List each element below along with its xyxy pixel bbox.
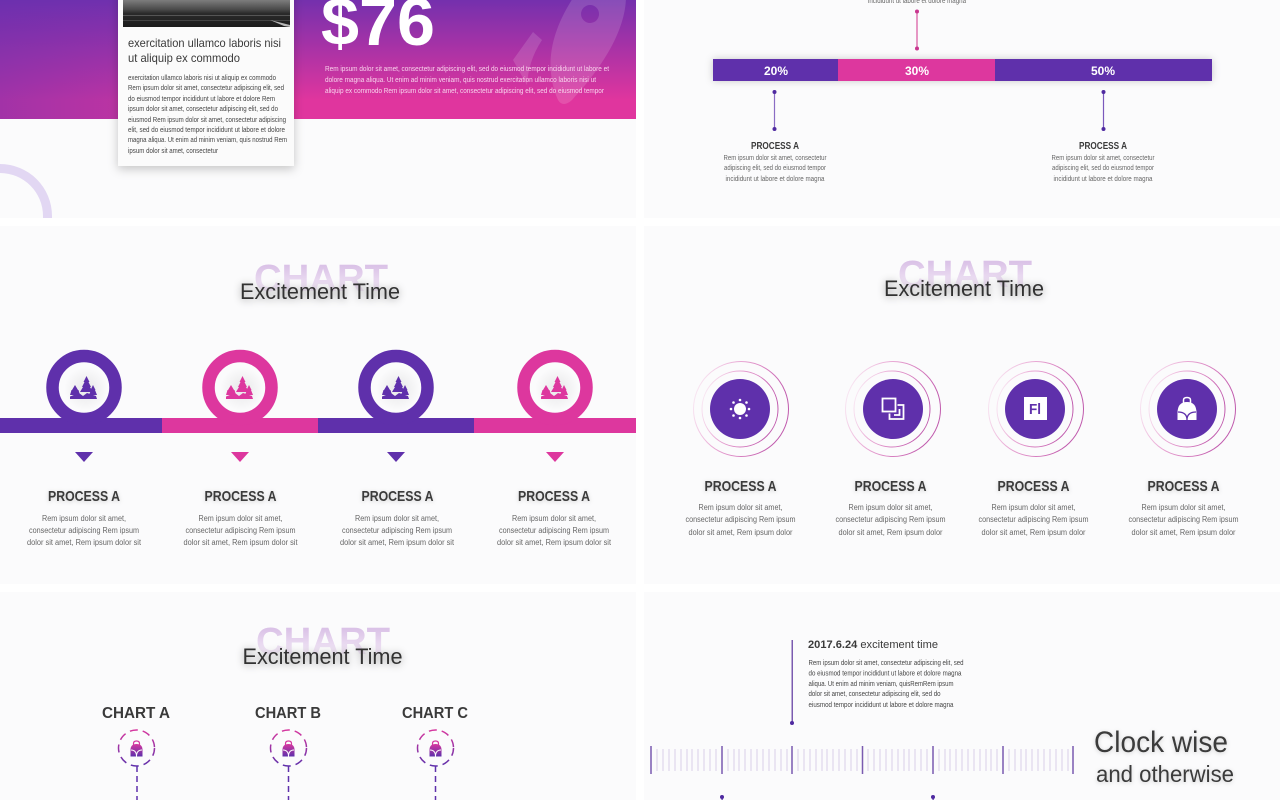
text: 50% process: Rem ipsum dolor sit amet, consectetur [1052,155,1155,162]
item 1: sun icon: PROCESS A [704,478,777,495]
text: 50% process: PROCESS A [1079,140,1127,152]
heading: Excitement Time [242,644,402,669]
card body: do eiusmod tempor incididunt ut labore et dolore Rem [128,96,275,103]
step 3: dolor sit amet, Rem ipsum dolor sit [340,538,455,547]
card body: ipsum dolor sit amet, consectetur [128,148,219,155]
step 3: consectetur adipiscing Rem ipsum [342,526,452,535]
text: 20% process: PROCESS A [751,140,799,152]
item 2: layers icon [836,362,946,537]
item 3: Fl file icon: dolor sit amet, Rem ipsum dolor [982,528,1086,537]
step 3: Rem ipsum dolor sit amet, [355,514,439,523]
item 2: layers icon: dolor sit amet, Rem ipsum dolor [838,528,943,537]
heading: Excitement Time [884,276,1044,301]
card body: elit, sed do eiusmod tempor incididunt ut labore et dolore [128,127,285,134]
tick ruler [651,746,1073,774]
photo [123,0,290,27]
connector: 20% [772,90,776,131]
caption [1094,726,1234,787]
card heading: exercitation ullamco laboris nisi [128,36,281,50]
stacked bar: 50% [1091,64,1115,78]
ribbon bar [0,418,636,433]
chart A: CHART A [102,705,170,722]
heading: Excitement Time [240,279,400,304]
card body: eiusmod Rem ipsum dolor sit amet, consectetur adipiscing [128,117,286,124]
card body: magna aliqua. Ut enim ad minim veniam, quis nostrud Rem [128,137,287,144]
step 2: Rem ipsum dolor sit amet, [198,514,282,523]
card heading [128,36,281,65]
step 1: dolor sit amet, Rem ipsum dolor sit [27,538,142,547]
step 4 [497,356,612,547]
event text: do eiusmod tempor incididunt ut labore et dolore magna [808,670,962,678]
banner text: aliquip ex commodo Rem ipsum dolor sit amet, consectetur adipiscing elit, sed do eiusmod tempor [325,88,605,95]
step 2: PROCESS A [204,488,277,505]
card body: exercitation ullamco laboris nisi ut aliquip ex commodo [128,75,276,82]
chart A [102,705,170,800]
step 2: dolor sit amet, Rem ipsum dolor sit [184,538,298,547]
step 1 [27,356,142,547]
heading: CHART [898,254,1032,296]
item 4: backpack icon: Rem ipsum dolor sit amet, [1142,503,1226,512]
event text: dolor sit amet, consectetur adipiscing elit, sed do [808,691,941,698]
item 3: Fl file icon: Rem ipsum dolor sit amet, [992,503,1076,512]
text: 20% process: Rem ipsum dolor sit amet, consectetur [724,155,827,162]
banner text [325,66,609,95]
item 1: sun icon: Rem ipsum dolor sit amet, [698,503,782,512]
bottom markers [720,795,935,800]
gradient banner [0,0,636,119]
card body [128,75,287,155]
text: 20% process [724,140,827,183]
item 2: layers icon: PROCESS A [854,478,927,495]
item 3: Fl file icon [978,362,1089,537]
text: 20% process: adipiscing elit, sed do eiusmod tempor [724,165,827,172]
step 4: Rem ipsum dolor sit amet, [512,514,596,523]
card body: ipsum dolor sit amet, consectetur adipiscing elit, sed do [128,106,278,113]
event text: Rem ipsum dolor sit amet, consectetur adipiscing elit, sed [808,660,964,667]
panel: chart columns slide [0,592,636,800]
item 3: Fl file icon: Fl [1029,401,1041,418]
item 1: sun icon [686,362,796,537]
connector: 30% [915,10,919,50]
heading: CHART [256,621,390,663]
step 2 [184,356,298,547]
stacked bar: 20% [764,64,788,78]
panel: ringed icons slide [644,226,1280,584]
step 3 [340,356,455,547]
card body: Rem ipsum dolor sit amet, consectetur adipiscing elit, sed [128,85,284,92]
icon: rocket watermark [513,0,626,104]
item 1: sun icon: consectetur adipiscing Rem ipsum [686,515,796,524]
step 1: PROCESS A [48,488,120,505]
chart B [255,705,321,800]
decorative ring [0,164,52,218]
item 3: Fl file icon: consectetur adipiscing Rem ipsum [978,515,1089,524]
panel: percentage bar slide [644,0,1280,218]
item 2: layers icon: Rem ipsum dolor sit amet, [848,503,932,512]
banner text: Rem ipsum dolor sit amet, consectetur adipiscing elit, sed do eiusmod tempor incididunt ut labore et [325,66,609,73]
card heading: ut aliquip ex commodo [128,51,240,65]
date heading: 2017.6.24 excitement time [808,639,938,651]
item 4: backpack icon: consectetur adipiscing Rem ipsum [1128,515,1239,524]
event text: aliqua. Ut enim ad minim veniam, quisRemRem ipsum [808,681,954,688]
step 4: PROCESS A [518,488,590,505]
panel: top left slide [0,0,636,218]
stacked bar [713,59,1212,81]
step 4: dolor sit amet, Rem ipsum dolor sit [497,538,612,547]
event text [808,660,964,709]
heading: CHART [254,258,388,300]
stacked bar: 30% [905,64,929,78]
text: 50% process [1052,140,1155,183]
event text: eiusmod tempor incididunt ut labore et dolore magna [808,702,954,709]
step 1: consectetur adipiscing Rem ipsum [29,526,139,535]
caption: Clock wise [1094,726,1228,759]
chart C [402,705,468,800]
chart C: CHART C [402,705,468,722]
panel: ribbon timeline slide [0,226,636,584]
marker line [790,640,794,725]
connector: 50% [1102,90,1106,131]
item 3: Fl file icon: PROCESS A [998,478,1070,495]
panel: clock timeline slide [644,592,1280,800]
step 1: Rem ipsum dolor sit amet, [42,514,126,523]
text: 50% process: incididunt ut labore et dolore magna [1054,176,1153,183]
item 2: layers icon: consectetur adipiscing Rem ipsum [836,515,946,524]
item 4: backpack icon: dolor sit amet, Rem ipsum dolor [1132,528,1236,537]
banner text: dolore magna aliqua. Ut enim ad minim veniam, quis nostrud exercitation ullamco laboris nisi ut [325,77,596,84]
text: 50% process: adipiscing elit, sed do eiusmod tempor [1052,165,1155,172]
step 4: consectetur adipiscing Rem ipsum [499,526,609,535]
text: 20% process: incididunt ut labore et dolore magna [726,176,825,183]
item 1: sun icon: dolor sit amet, Rem ipsum dolor [688,528,793,537]
item 4: backpack icon [1128,362,1239,537]
item 4: backpack icon: PROCESS A [1148,478,1220,495]
step 3: PROCESS A [362,488,434,505]
card [118,0,294,166]
step 2: consectetur adipiscing Rem ipsum [186,526,296,535]
caption: and otherwise [1096,761,1234,787]
chart B: CHART B [255,705,321,722]
